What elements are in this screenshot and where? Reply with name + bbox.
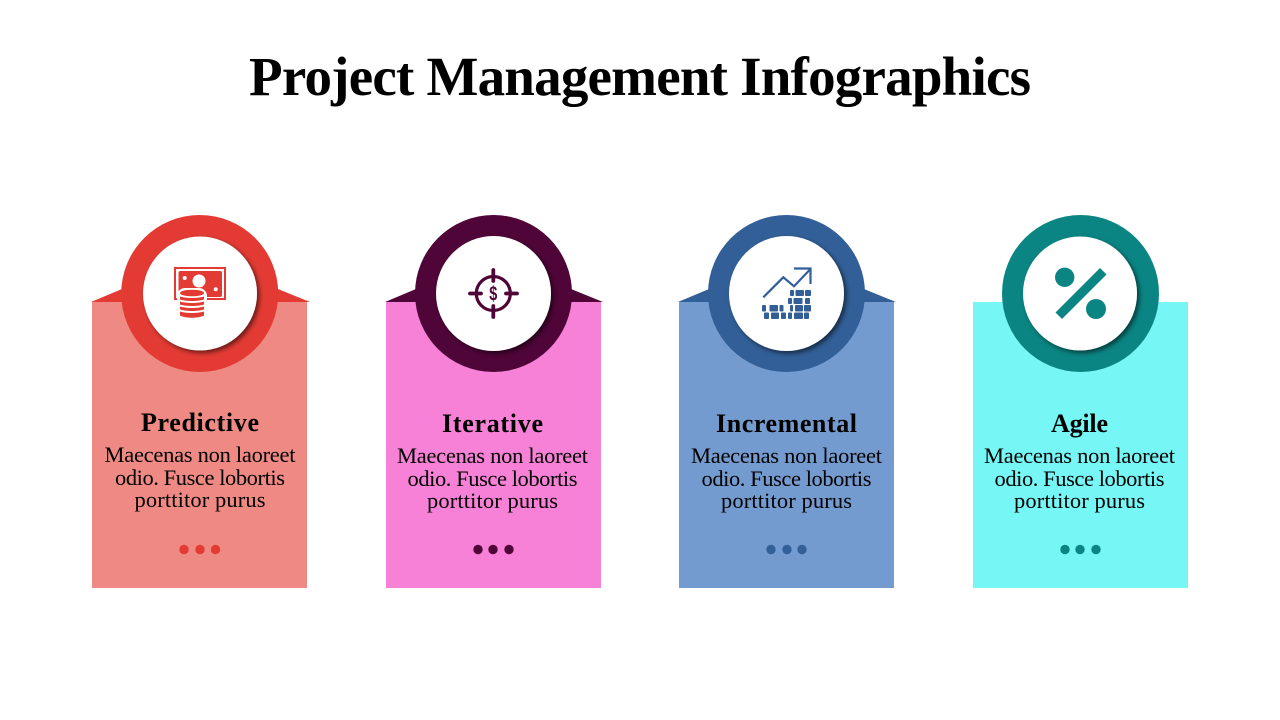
- inner circle: [436, 236, 551, 351]
- icon: banknote and coins: [175, 268, 225, 320]
- ring: [708, 215, 865, 372]
- body text: porttitor purus: [134, 487, 266, 512]
- body text: [984, 443, 1176, 513]
- body text: [691, 443, 883, 513]
- ribbon tips: [385, 289, 603, 302]
- panel: Predictive: [91, 215, 310, 588]
- ribbon tips: [91, 289, 310, 302]
- panel: Agile: [973, 215, 1188, 588]
- body text: Maecenas non laoreet: [691, 443, 883, 468]
- body text: porttitor purus: [721, 488, 852, 513]
- ring: [415, 215, 572, 372]
- heading: Predictive: [141, 408, 259, 437]
- body text: Maecenas non laoreet: [984, 443, 1176, 468]
- body text: porttitor purus: [1014, 488, 1145, 513]
- body text: odio. Fusce lobortis: [702, 466, 872, 491]
- heading: Incremental: [716, 409, 857, 438]
- dots: [473, 545, 514, 554]
- body text: odio. Fusce lobortis: [408, 466, 578, 491]
- body text: [104, 442, 296, 512]
- card background: [92, 302, 307, 588]
- body text: Maecenas non laoreet: [104, 442, 296, 467]
- inner circle: [143, 236, 257, 350]
- ring: [1002, 215, 1159, 372]
- panel: Iterative: [385, 215, 603, 588]
- icon: target with dollar: $: [489, 282, 498, 305]
- dots: [1060, 545, 1101, 554]
- icon: percent: [1055, 268, 1106, 319]
- inner circle: [1023, 236, 1137, 350]
- body text: Maecenas non laoreet: [397, 443, 589, 468]
- body text: odio. Fusce lobortis: [994, 466, 1164, 491]
- icon: rising chart with bricks: [762, 268, 811, 319]
- icon: target with dollar: [470, 270, 517, 317]
- card background: [386, 302, 601, 588]
- card background: [679, 302, 894, 588]
- heading: Iterative: [442, 409, 543, 438]
- body text: porttitor purus: [427, 488, 558, 513]
- heading: Agile: [1051, 409, 1108, 438]
- title: Project Management Infographics: [249, 46, 1031, 107]
- inner circle: [729, 236, 844, 351]
- ribbon tips: [678, 289, 896, 302]
- ring: [121, 215, 278, 372]
- dots: [766, 545, 807, 554]
- card background: [973, 302, 1188, 588]
- body text: odio. Fusce lobortis: [115, 465, 285, 490]
- body text: [397, 443, 589, 513]
- panel: Incremental: [678, 215, 896, 588]
- dots: [179, 545, 220, 554]
